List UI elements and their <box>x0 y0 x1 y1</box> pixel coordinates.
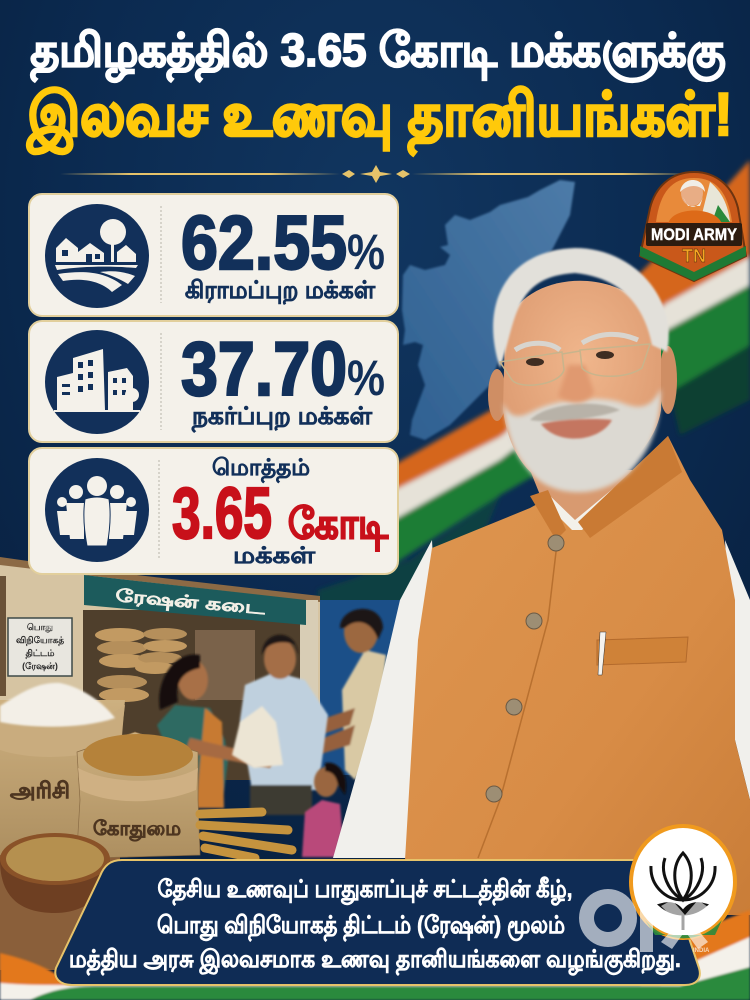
tricolor bottom <box>0 910 750 1000</box>
map of Tamil Nadu <box>402 180 575 440</box>
stat 37.70%: 37.70 <box>181 327 347 412</box>
neck <box>530 445 660 525</box>
tricolor swoosh <box>318 160 750 680</box>
divider <box>160 333 162 430</box>
blue wall behind shop <box>318 600 403 775</box>
pocket <box>597 637 688 665</box>
ears <box>488 369 506 421</box>
vest collar <box>530 436 682 540</box>
kurta right <box>725 540 750 800</box>
BJP lotus badge <box>631 826 735 938</box>
nose <box>558 365 594 403</box>
logo text TN: TN <box>682 246 706 266</box>
shop wall right <box>300 600 318 730</box>
label total: மொத்தம் <box>212 454 310 483</box>
hair <box>493 248 669 368</box>
logo text: MODI ARMY <box>651 225 738 244</box>
icon: city <box>45 330 149 434</box>
label urban: நகர்ப்புற மக்கள் <box>191 403 372 433</box>
label people: மக்கள் <box>233 542 316 568</box>
logo: Modi Army TN <box>640 172 746 281</box>
shirt collar <box>542 455 662 530</box>
panel: footer statement <box>55 860 700 985</box>
divider <box>160 206 162 303</box>
gold divider <box>60 165 692 183</box>
food parcel <box>232 706 283 768</box>
notice board: திட்டம் <box>26 648 54 659</box>
notice board <box>8 618 72 676</box>
sack label rice: அரிசி <box>10 778 70 803</box>
percent sign: % <box>347 350 385 406</box>
grain bowl <box>0 833 110 913</box>
man in blue shirt <box>240 635 328 815</box>
face <box>503 281 661 488</box>
icon: village <box>45 204 149 308</box>
moustache <box>530 404 620 421</box>
card: urban <box>29 321 398 442</box>
beard <box>503 388 661 492</box>
OLX watermark <box>579 886 710 954</box>
notice board: பொது <box>27 622 53 633</box>
vest <box>405 436 750 915</box>
icon: people <box>45 458 149 562</box>
percent sign: % <box>347 224 385 280</box>
placket <box>478 535 558 858</box>
divider <box>158 460 160 560</box>
shop interior <box>83 610 300 780</box>
footer line 1: தேசிய உணவுப் பாதுகாப்புச் சட்டத்தின் கீழ், <box>158 876 572 906</box>
notice board: (ரேஷன்) <box>22 661 58 672</box>
title line 1: தமிழகத்தில் 3.65 கோடி மக்களுக்கு <box>30 24 726 82</box>
stat 62.55%: 62.55 <box>181 201 347 286</box>
footer line 3: மத்திய அரசு இலவசமாக உணவு தானியங்களை வழங்குகிறது. <box>69 946 681 976</box>
footer line 2: பொது விநியோகத் திட்டம் (ரேஷன்) மூலம் <box>157 912 565 942</box>
mouth <box>541 419 612 439</box>
ration shop <box>0 557 320 780</box>
stat unit: கோடி <box>288 500 389 551</box>
pen <box>598 632 606 675</box>
wood table <box>0 850 120 970</box>
watermark label: INDIA <box>693 948 710 954</box>
lotus icon <box>651 853 715 930</box>
eyes and brows <box>515 334 638 366</box>
man in beige shirt <box>276 609 386 780</box>
card: total <box>29 448 398 574</box>
shop sign <box>84 575 306 625</box>
sack label wheat: கோதுமை <box>93 818 181 842</box>
title <box>27 24 732 157</box>
wheat stalks <box>200 812 292 858</box>
buttons <box>486 535 564 802</box>
stat 3.65: 3.65 <box>172 474 272 554</box>
shop sign: ரேஷன் கடை <box>115 586 266 619</box>
label rural: கிராமப்புற மக்கள் <box>185 277 375 305</box>
girl <box>302 763 346 857</box>
card: rural <box>29 194 398 316</box>
glasses <box>500 344 650 385</box>
kurta left <box>333 540 440 858</box>
rice sack <box>0 683 125 855</box>
woman <box>157 654 275 808</box>
Modi portrait <box>333 248 750 915</box>
wheat sack <box>77 732 200 858</box>
notice board: விநியோகத் <box>16 635 64 646</box>
